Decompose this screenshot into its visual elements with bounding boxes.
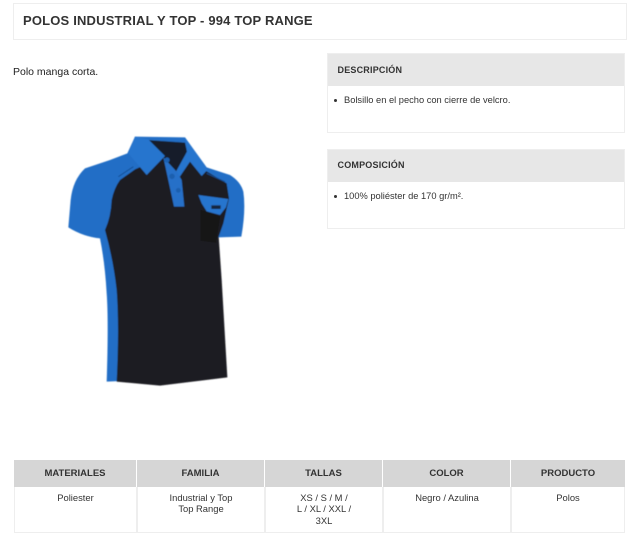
placket buttons [164, 157, 181, 193]
column header: tallas [265, 460, 382, 487]
column header: producto [511, 460, 625, 487]
placket [163, 157, 184, 207]
shoulder seams [118, 167, 225, 182]
cell: familia [137, 487, 265, 533]
bullet text: 100% poliéster de 170 gr/m². [344, 191, 463, 201]
black body [105, 153, 229, 386]
column header: materiales [14, 460, 136, 487]
column header: producto: PRODUCTO [541, 468, 595, 479]
panel: composición [327, 149, 625, 229]
heading: composición: COMPOSICIÓN [338, 160, 405, 170]
title bar [13, 3, 627, 40]
column header: familia [137, 460, 264, 487]
cell: tallas: L / XL / XXL / [297, 503, 351, 514]
column header: tallas: TALLAS [305, 468, 342, 479]
cell: producto: Polos [556, 492, 580, 502]
cell: familia: Top Range [178, 503, 224, 514]
cell: materiales [14, 487, 137, 533]
cell: tallas: 3XL [316, 514, 332, 526]
bullet text: Bolsillo en el pecho con cierre de velcro. [344, 95, 510, 105]
pocket label [211, 205, 221, 209]
column header: color: COLOR [429, 468, 464, 479]
title bar: POLOS INDUSTRIAL Y TOP - 994 TOP RANGE [23, 13, 313, 28]
product image: polo shirt [68, 136, 246, 386]
column header: color [383, 460, 510, 487]
cell: tallas: XS / S / M / [300, 492, 348, 502]
intro text: Polo manga corta. [13, 66, 98, 78]
left collar [128, 137, 165, 175]
cell: producto [511, 487, 625, 533]
cell: materiales: Poliester [57, 492, 94, 502]
heading: descripción: DESCRIPCIÓN [338, 65, 402, 75]
blue sleeves and side panel [68, 137, 244, 382]
inner neck [147, 140, 187, 172]
right collar [176, 137, 207, 177]
heading: composición [328, 150, 624, 182]
cell: familia: Industrial y Top [170, 492, 232, 502]
cell: color [383, 487, 511, 533]
cell: tallas [265, 487, 383, 533]
cell: color: Negro / Azulina [415, 492, 479, 502]
heading: descripción [328, 54, 624, 86]
panel: descripción [327, 53, 625, 133]
column header: familia: FAMILIA [182, 468, 220, 479]
column header: materiales: MATERIALES [44, 468, 106, 479]
pocket [201, 210, 220, 243]
pocket flap [198, 195, 228, 215]
